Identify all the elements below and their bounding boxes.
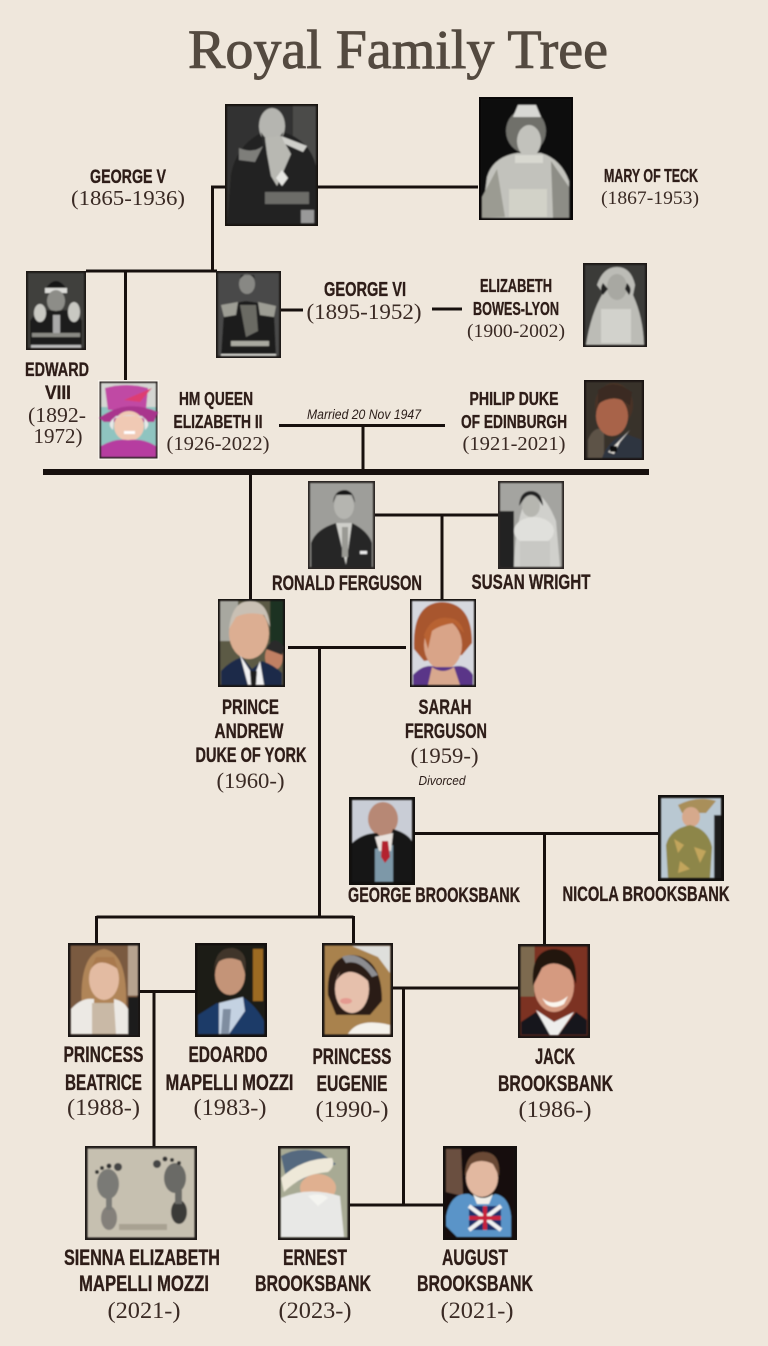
photo: George VI (216, 271, 281, 358)
label: Sarah Ferguson: (1959-) (410, 743, 478, 768)
label: Princess Eugenie (312, 1044, 392, 1122)
photo: Philip Duke of Edinburgh (584, 380, 644, 460)
label: Jack Brooksbank: BROOKSBANK (498, 1071, 613, 1096)
label: Sienna Elizabeth Mapelli Mozzi: (2021-) (108, 1298, 180, 1323)
connector lines (43, 187, 658, 1205)
label: Prince Andrew: ANDREW (214, 720, 284, 743)
label: Princess Eugenie: (1990-) (316, 1097, 388, 1122)
label: George VI: GEORGE VI (324, 279, 406, 301)
label: Sienna Elizabeth Mapelli Mozzi (64, 1245, 220, 1323)
label: Sarah Ferguson: SARAH (418, 696, 472, 719)
label: Philip Duke of Edinburgh: (1921-2021) (462, 433, 566, 455)
label: Queen Elizabeth II: HM QUEEN (179, 389, 253, 409)
label: Mary of Teck: (1867-1953) (601, 189, 699, 209)
label: Ernest Brooksbank: (2023-) (278, 1298, 352, 1323)
label: Philip Duke of Edinburgh: OF EDINBURGH (461, 412, 567, 432)
label: George Brooksbank: GEORGE BROOKSBANK (348, 884, 520, 907)
photo: Nicola Brooksbank (658, 795, 724, 881)
label: Elizabeth Bowes-Lyon: ELIZABETH (480, 276, 552, 296)
label: Edoardo Mapelli Mozzi: (1983-) (194, 1095, 266, 1120)
photo: Prince Andrew (218, 599, 285, 687)
label: Princess Beatrice: PRINCESS (64, 1042, 144, 1067)
label: Prince Andrew: PRINCE (222, 696, 279, 719)
label: August Brooksbank: AUGUST (442, 1245, 508, 1270)
label: Princess Beatrice: (1988-) (67, 1095, 140, 1120)
label: Philip Duke of Edinburgh: PHILIP DUKE (470, 389, 558, 409)
label: Married 20 Nov 1947: Married 20 Nov 1947 (307, 407, 421, 422)
label: George VI (306, 279, 422, 324)
label: George V: (1865-1936) (71, 186, 185, 210)
photo: George V (225, 104, 318, 226)
label: Edward VIII: 1972) (34, 424, 82, 448)
photo: August Brooksbank (443, 1146, 517, 1240)
label: Edward VIII (25, 360, 89, 448)
label: Princess Beatrice (64, 1042, 144, 1120)
label: Edoardo Mapelli Mozzi (166, 1042, 294, 1120)
photo: Susan Wright (498, 481, 564, 569)
label: Elizabeth Bowes-Lyon: BOWES-LYON (473, 299, 559, 319)
label: Edward VIII: VIII (45, 383, 71, 404)
photo: Elizabeth Bowes-Lyon (583, 263, 647, 347)
label: Philip Duke of Edinburgh (461, 389, 567, 455)
photo: Ronald Ferguson (308, 481, 375, 569)
label: Ernest Brooksbank: BROOKSBANK (255, 1271, 371, 1296)
label: Ernest Brooksbank: ERNEST (283, 1245, 347, 1270)
photo: Sienna Elizabeth footprints (85, 1146, 197, 1240)
label: Jack Brooksbank: JACK (535, 1044, 575, 1069)
label: Edoardo Mapelli Mozzi: EDOARDO (188, 1042, 268, 1067)
label: Princess Eugenie: EUGENIE (316, 1071, 388, 1096)
label: Princess Eugenie: PRINCESS (312, 1044, 392, 1069)
label: Mary of Teck: MARY OF TECK (604, 166, 698, 186)
photo: George Brooksbank (349, 797, 415, 885)
label: August Brooksbank: BROOKSBANK (417, 1271, 533, 1296)
label: Divorced: Divorced (418, 773, 466, 788)
label: Sarah Ferguson (405, 696, 487, 768)
label: Queen Elizabeth II: ELIZABETH II (174, 412, 262, 432)
label: Edoardo Mapelli Mozzi: MAPELLI MOZZI (166, 1070, 294, 1095)
label: Queen Elizabeth II: (1926-2022) (166, 433, 270, 455)
label: Prince Andrew: DUKE OF YORK (196, 744, 306, 767)
label: Edward VIII: (1892- (28, 403, 86, 427)
photo: Sarah Ferguson (410, 599, 476, 687)
label: Edward VIII: EDWARD (25, 360, 89, 381)
label: Prince Andrew (196, 696, 306, 793)
label: Susan Wright: SUSAN WRIGHT (472, 571, 591, 594)
label: George V: GEORGE V (90, 167, 166, 188)
photo: Princess Beatrice (68, 943, 140, 1037)
label: Jack Brooksbank: (1986-) (518, 1097, 592, 1122)
label: August Brooksbank (417, 1245, 533, 1323)
label: George V (71, 167, 185, 210)
label: Elizabeth Bowes-Lyon (467, 276, 565, 342)
photo: Jack Brooksbank (518, 944, 590, 1038)
label: Sienna Elizabeth Mapelli Mozzi: MAPELLI MOZZI (79, 1271, 209, 1296)
label: Prince Andrew: (1960-) (216, 768, 284, 793)
label: Mary of Teck (601, 166, 699, 209)
label: Ronald Ferguson: RONALD FERGUSON (272, 572, 422, 595)
label: George VI: (1895-1952) (306, 299, 422, 324)
photo: Mary of Teck (479, 97, 573, 220)
label: Sienna Elizabeth Mapelli Mozzi: SIENNA ELIZABETH (64, 1245, 220, 1270)
label: August Brooksbank: (2021-) (440, 1298, 514, 1323)
label: Sarah Ferguson: FERGUSON (405, 720, 487, 743)
photo: Edoardo Mapelli Mozzi (195, 943, 267, 1037)
photo: Princess Eugenie (322, 943, 393, 1037)
label: Princess Beatrice: BEATRICE (65, 1070, 142, 1095)
title: Royal Family Tree (188, 19, 608, 80)
photo: Queen Elizabeth II (98, 380, 159, 460)
label: Elizabeth Bowes-Lyon: (1900-2002) (467, 321, 565, 342)
photo: Ernest Brooksbank (278, 1146, 350, 1240)
label: Jack Brooksbank (498, 1044, 613, 1122)
photo: Edward VIII (26, 271, 86, 350)
label: Ernest Brooksbank (255, 1245, 371, 1323)
label: Queen Elizabeth II (166, 389, 270, 455)
